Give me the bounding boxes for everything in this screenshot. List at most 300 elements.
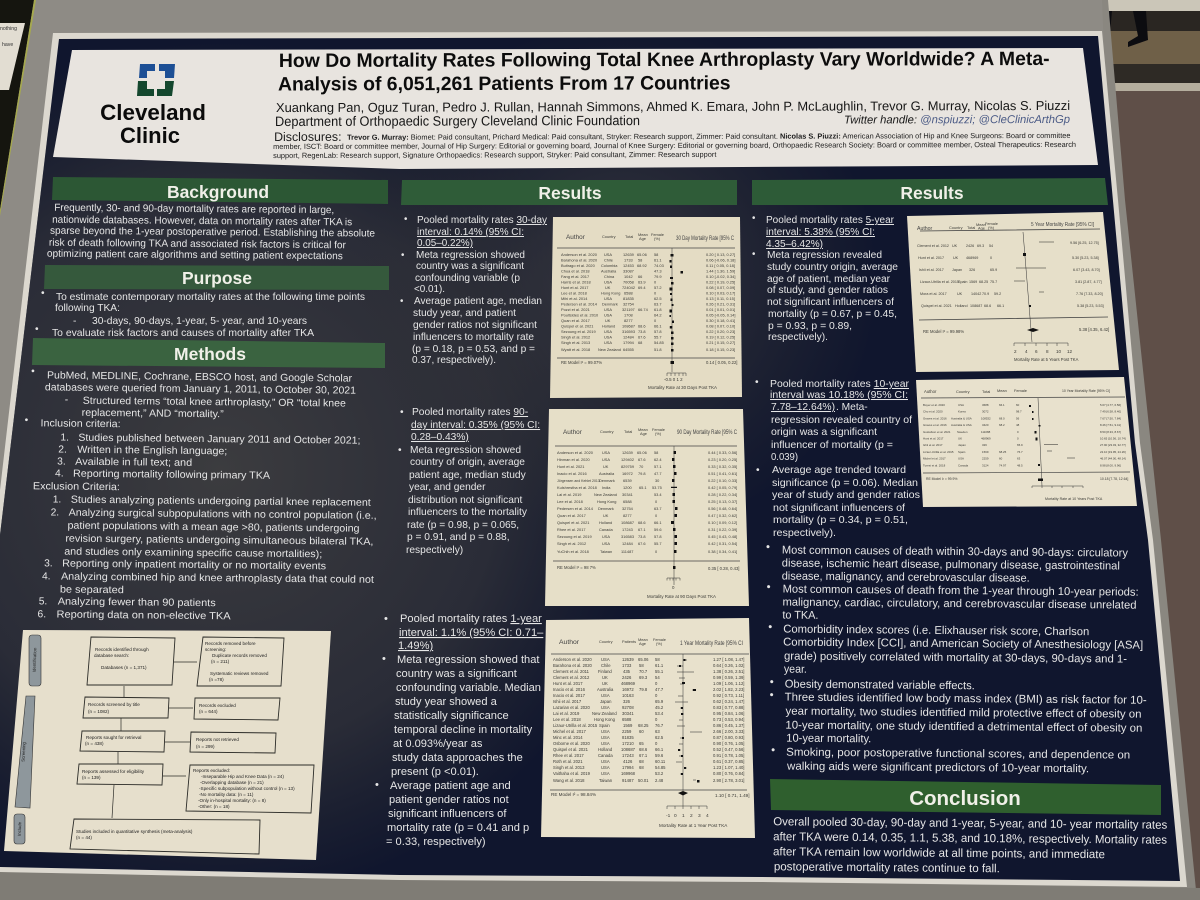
text: 10-year results: . Meta- bbox=[836, 402, 868, 413]
text: 10-year results: regression revealed country of bbox=[771, 415, 912, 426]
heading: Results centre bbox=[401, 180, 737, 205]
chart: 90-day forest plot: Sezoung et al. 2019 bbox=[557, 534, 592, 539]
chart: 10-year forest plot: Australia & USA bbox=[951, 423, 972, 427]
box: records identified: Databases (n = 1,371) bbox=[101, 665, 147, 670]
text: 30-day results: Average patient age, median bbox=[414, 296, 542, 307]
chart: 90-day forest plot: Author bbox=[563, 429, 583, 436]
chart: 30-day forest plot: 64.2 bbox=[654, 312, 662, 318]
chart: 30-day forest plot: 0.08 [ 0.07, 0.09] bbox=[706, 285, 735, 290]
chart: 10-year forest plot: 68.0 bbox=[999, 416, 1005, 420]
chart: 10-year forest plot: 2259 bbox=[982, 457, 989, 461]
box: records removed: (n =78) bbox=[209, 677, 224, 682]
chart: 5-year forest plot: 326 bbox=[969, 268, 975, 272]
logo wordmark bbox=[100, 100, 206, 148]
chart: 5-year forest plot: 75.7 bbox=[990, 280, 997, 284]
chart: 30-day forest plot: 6588 bbox=[624, 290, 633, 296]
chart: 30-day forest plot: 316593 bbox=[622, 329, 635, 334]
chart: 90-day forest plot: 65.1 bbox=[639, 485, 647, 490]
chart: 10-year forest plot: Spain bbox=[958, 450, 966, 454]
chart: 30-day forest plot: 0.21 [ 0.15, 0.27] bbox=[706, 340, 735, 345]
heading: Conclusion: Conclusion bbox=[909, 787, 1021, 810]
text: 10-year results: not significant influencers of bbox=[773, 503, 905, 514]
chart: 90-day forest plot: USA bbox=[602, 541, 610, 546]
chart: 90-day forest plot: 0.23 [ 0.20, 0.25] bbox=[708, 457, 737, 462]
box: studies included: Studies included in quantitative synthesis (meta-analysis) bbox=[76, 829, 193, 834]
chart: 10-year forest plot: Canada bbox=[958, 463, 969, 467]
disclosures bbox=[273, 128, 1076, 160]
text: 90-day results: Meta regression showed bbox=[410, 445, 521, 456]
chart: 10-year forest plot: Australia & USA bbox=[951, 416, 972, 420]
chart: 30-day forest plot: 57.2 bbox=[654, 285, 662, 290]
chart: 1-year forest plot: 58 bbox=[655, 657, 660, 662]
chart: 10-year forest plot: 63 bbox=[1017, 457, 1021, 461]
chart: 10-year forest plot: 76.7 bbox=[1017, 450, 1023, 454]
chart: 30-day forest plot: 17994 bbox=[623, 340, 635, 345]
chart: 90-day forest plot: 67.6 bbox=[638, 457, 646, 462]
chart: 90-day forest plot: 0.56 [ 0.48, 0.64] bbox=[708, 506, 737, 511]
chart: 1-year forest plot: 2.66 [ 2.00, 3.33] bbox=[713, 729, 744, 734]
chart: 1-year forest plot: Rhee et al. 2017 bbox=[553, 753, 584, 758]
arrows: flow connectors bbox=[112, 662, 197, 818]
chart: 5-year forest plot: Female bbox=[985, 221, 998, 226]
chart: 1-year forest plot: Michel et al. 2017 bbox=[553, 729, 586, 734]
logo wordmark: Cleveland bbox=[100, 100, 206, 125]
chart: 30-day forest plot: 724042 bbox=[622, 285, 635, 290]
chart: 90-day forest plot: 0.51 [ 0.41, 0.61] bbox=[708, 471, 737, 476]
text: 30-day results: study year, and patient bbox=[413, 308, 516, 319]
chart: 10-year forest plot: 8.98 [8.00, 9.96] bbox=[1100, 463, 1121, 467]
chart: 90-day forest plot: 66.1 bbox=[654, 520, 662, 525]
box: records identified bbox=[87, 637, 175, 685]
text: 30-day results: • bbox=[401, 250, 405, 261]
chart: 10-year forest plot: 48 bbox=[1016, 423, 1020, 427]
text: 30-day results: influencers to mortality rate bbox=[413, 332, 534, 343]
text: 5-year results: 4.35–6.42%) bbox=[766, 239, 823, 250]
chart: 90-day forest plot: 67.1 bbox=[638, 527, 646, 532]
chart: 5-year forest plot: 10 bbox=[1056, 349, 1062, 354]
chart: 10-year forest plot: 5.67 [4.77, 6.56] bbox=[1100, 403, 1121, 407]
chart: 1-year forest plot: 0.62 [ 0.24, 1.47] bbox=[713, 699, 744, 704]
chart: 10-year forest plot: 3124 bbox=[982, 463, 989, 467]
chart: 10-year forest plot: 1569 bbox=[982, 450, 989, 454]
chart: 90-day forest plot: 57.8 bbox=[654, 534, 662, 539]
chart: 30-day forest plot: 61.1 bbox=[654, 258, 662, 262]
text: 30-day results: confounding variable (p bbox=[415, 273, 520, 284]
chart: 10-year forest plot: 0 bbox=[1017, 436, 1019, 440]
chart: 5-year forest plot: 2 bbox=[1014, 349, 1017, 354]
chart: 5-year forest plot: UK bbox=[953, 256, 959, 260]
text: 90-day results: patient age, median study bbox=[409, 470, 527, 481]
chart: 5-year forest plot: 3.81 [2.87, 4.77] bbox=[1075, 280, 1102, 284]
chart: 90-day forest plot: Mortality Rate at 90 Days Post TKA bbox=[647, 594, 716, 599]
text: methods list: Studies published between January 2011 and October 2021; bbox=[78, 433, 360, 447]
text: background paragraph: Frequently, 30- and 90-day mortality rates are reported in large, bbox=[54, 203, 334, 216]
chart: 90-day forest plot: 57.1 bbox=[654, 464, 662, 469]
chart: 30-day forest plot: Total bbox=[625, 234, 633, 239]
chart: 1-year forest plot: Hunt et al. 2017 bbox=[553, 681, 583, 686]
heading: Conclusion bbox=[770, 779, 1161, 815]
chart: 90-day forest plot: 58 bbox=[654, 450, 658, 455]
text: methods list bbox=[23, 366, 378, 624]
box: reports not retrieved: Reports not retrieved bbox=[196, 737, 239, 742]
chart: 90-day forest plot: 0.31 [ 0.22, 0.39] bbox=[708, 527, 737, 532]
text: 1-year results: study year showed a bbox=[395, 696, 498, 708]
chart: 30-day forest plot: 0.05 [-0.05, 0.14] bbox=[706, 312, 735, 318]
chart: 30-day forest plot bbox=[550, 217, 742, 398]
chart: 90-day forest plot: 0.38 [ 0.34, 0.41] bbox=[708, 549, 737, 554]
chart: 1-year forest plot: 169968 bbox=[621, 771, 636, 776]
box: reports excluded: -Inseparable Hip and Knee Data (n = 24) bbox=[201, 774, 284, 779]
side label: Identification bbox=[29, 635, 41, 686]
chart: 5-year forest plot: 6.07 [3.43, 8.70] bbox=[1073, 268, 1100, 272]
chart: 1-year forest plot: 66.1 bbox=[655, 747, 664, 752]
text: 90-day results: country of origin, average bbox=[410, 457, 525, 468]
text: 10-year results: 0.039) bbox=[771, 452, 798, 463]
chart: 90-day forest plot: Denmark bbox=[598, 506, 614, 511]
neighbouring poster at top left: have bbox=[2, 42, 13, 48]
chart: 5-year forest plot: 2426 bbox=[966, 244, 974, 248]
text: 10-year results: • bbox=[755, 377, 759, 388]
text: methods list: 2. bbox=[51, 507, 59, 519]
chart: 1-year forest plot: 79.8 bbox=[639, 687, 648, 692]
text: causes and risk factors: 10-year mortality, one study identified a detrimental effect of obesity on bbox=[785, 720, 1142, 735]
chart: 90-day forest plot: Rhee et al. 2017 bbox=[557, 527, 586, 532]
chart: 90-day forest plot: 30 bbox=[655, 478, 660, 483]
text: methods list: Reporting data on non-elective TKA bbox=[57, 610, 231, 622]
chart: 10-year forest plot: 65.9 bbox=[1017, 443, 1023, 447]
text: methods list: PubMed, MEDLINE, Cochrane, EBSCO host, and Google Scholar bbox=[47, 370, 353, 385]
text: 30-day results: (p = 0.18, p = 0.53, and p = bbox=[412, 344, 535, 355]
chart: 1-year forest plot: Spain bbox=[599, 723, 610, 728]
chart: 10-year forest plot: 10 Year Mortality Rate [95% CI] bbox=[1062, 389, 1110, 393]
chart: 1-year forest plot: 0 bbox=[674, 813, 677, 819]
chart: 10-year forest plot: 74.97 bbox=[999, 463, 1007, 467]
text: 5-year results: age of patient, median year bbox=[767, 274, 891, 285]
chart: 30-day forest plot: (%) bbox=[654, 236, 661, 241]
text: causes and risk factors: disease, malignancy, and cerebrovascular disease. bbox=[782, 571, 1030, 585]
heading: Methods: Methods bbox=[174, 344, 246, 364]
chart: 10-year forest plot: USA bbox=[958, 457, 964, 461]
chart: 1-year forest plot: Taiwan bbox=[599, 778, 613, 783]
chart: 10-year forest plot: 7.67 [7.50, 7.84] bbox=[1100, 416, 1121, 420]
chart: 1-year forest plot: Clement et al. 2011 bbox=[553, 669, 590, 674]
chart: 30-day forest plot: 12639 bbox=[623, 252, 634, 257]
chart: 30-day forest plot: 55.7 bbox=[654, 334, 662, 340]
chart: 30-day forest plot: 30 Day Mortality Rate [95% C bbox=[676, 235, 734, 242]
chart: 1-year forest plot: 0.86 [ 0.45, 1.37] bbox=[713, 723, 744, 728]
chart: 30-day forest plot: 79.9 bbox=[654, 274, 662, 279]
text: 5-year results: • bbox=[752, 213, 756, 224]
chart: 30-day forest plot: Holland bbox=[602, 324, 615, 328]
text: causes and risk factors: year. bbox=[784, 664, 807, 676]
chart: 1-year forest plot: Barahona et al. 2020 bbox=[553, 663, 593, 668]
chart: 1-year forest plot: New Zealand bbox=[592, 711, 617, 716]
chart: 90-day forest plot: Holland bbox=[599, 520, 612, 525]
chart: 5-year forest plot: 5.38 [4.35, 6.42] bbox=[1079, 327, 1109, 332]
chart: 30-day forest plot: 0.22 [ 0.20, 0.23] bbox=[706, 329, 735, 334]
box: records excluded: (n = 644) bbox=[199, 709, 218, 714]
chart: 10-year forest plot bbox=[916, 377, 1137, 507]
chart: 30-day forest plot: 0 bbox=[654, 280, 657, 284]
text: 10-year results: respectively). bbox=[773, 528, 836, 539]
chart: 1-year forest plot: -1 bbox=[666, 813, 671, 819]
chart: 1-year forest plot: 0 bbox=[655, 741, 658, 746]
chart: 10-year forest plot: 3072 bbox=[982, 410, 989, 414]
chart: 90-day forest plot: USA bbox=[602, 450, 610, 455]
text: methods list: Analyzing combined hip and knee arthroplasty data that could not bbox=[61, 572, 374, 586]
chart: 30-day forest plot: 58 bbox=[654, 252, 658, 257]
chart: 1-year forest plot: Holland bbox=[598, 747, 613, 752]
text: 1-year results: temporal decline in mortality bbox=[394, 724, 533, 736]
chart: 30-day forest plot: 12453 bbox=[623, 263, 634, 268]
chart: 30-day forest plot: 0.10 [-0.02, 0.34] bbox=[706, 274, 735, 279]
neighbouring poster at top left bbox=[0, 0, 36, 216]
text: methods list: - bbox=[65, 395, 68, 406]
text: methods list: Analyzing surgical subpopulations with no control population (i.e., bbox=[69, 508, 377, 522]
chart: 30-day forest plot: Australia bbox=[601, 268, 617, 274]
chart: 1-year forest plot: USA bbox=[601, 771, 610, 776]
chart: 10-year forest plot: Graves et al. 2016 bbox=[923, 416, 947, 420]
chart: 30-day forest plot: 0.26 [ 0.21, 0.31] bbox=[706, 302, 735, 306]
box: reports excluded: -Other: (n = 18) bbox=[198, 804, 230, 809]
text: 5-year results: of study, and gender ratios bbox=[767, 285, 888, 296]
box: records removed: Systematic reviews removed bbox=[210, 671, 269, 676]
side label: Included bbox=[14, 814, 25, 844]
chart: 1-year forest plot: Inacio et al. 2016 bbox=[553, 687, 586, 692]
text: conclusion paragraph: Overall pooled 30-day, 90-day and 1-year, 5-year, and 10- year mortality rates bbox=[773, 815, 1167, 832]
heading: Background: Background bbox=[167, 182, 269, 202]
box: reports excluded: -No mortality data: (n = 11) bbox=[199, 792, 254, 797]
text: 1-year results: • bbox=[384, 613, 388, 625]
chart: 90-day forest plot: 108687 bbox=[621, 520, 634, 525]
chart: 30-day forest plot: Singh et al. 2012 bbox=[561, 334, 590, 340]
chart: 5-year forest plot: Ishii et al. 2017 bbox=[919, 268, 944, 272]
chart: 30-day forest plot: USA bbox=[604, 296, 612, 301]
chart: 1-year forest plot: 58 bbox=[639, 663, 644, 668]
text: 90-day results: • bbox=[398, 445, 402, 456]
chart: 1-year forest plot: 3 bbox=[698, 813, 701, 819]
chart: 30-day forest plot: Buitrago et al. 2020 bbox=[561, 263, 596, 268]
heading: Purpose bbox=[44, 265, 389, 290]
chart: 30-day forest plot: 12484 bbox=[623, 334, 635, 340]
text: conclusion paragraph: after TKA remain low worldwide at all time points, and immediate bbox=[773, 845, 1105, 861]
chart: 5-year forest plot: 8 bbox=[1046, 349, 1049, 354]
chart: 30-day forest plot: 63.7 bbox=[654, 302, 662, 306]
chart: 30-day forest plot: Sezoung et al. 2019 bbox=[561, 329, 596, 334]
chart: 10-year forest plot: 3688 bbox=[982, 403, 989, 407]
chart: 30-day forest plot: 0.20 [ 0.13, 0.27] bbox=[706, 252, 735, 257]
chart: 10-year forest plot: Graves et al. 2016 bbox=[923, 423, 947, 427]
text: causes and risk factors: Comorbidity Index [CCI], and American Society of Anesthesiology [ASA] bbox=[783, 637, 1143, 652]
chart: 10-year forest plot: 10.18 [7.78, 12.64] bbox=[1100, 477, 1128, 481]
chart: 1-year forest plot: 53.2 bbox=[655, 771, 664, 776]
chart: 1-year forest plot: Roth et al. 2021 bbox=[553, 759, 583, 764]
text: 90-day results: Pooled mortality rates 90- bbox=[412, 407, 528, 418]
chart: 1-year forest plot: 65.06 bbox=[638, 657, 649, 662]
chart: 1-year forest plot: 65.9 bbox=[655, 699, 664, 704]
heading: Results right bbox=[752, 178, 1108, 205]
chart: 5-year forest plot: 468969 bbox=[966, 256, 978, 260]
chart: 90-day forest plot: 6588 bbox=[623, 499, 632, 504]
chart: 5-year forest plot: RE Model I² = 99.98% bbox=[923, 329, 964, 334]
text: background paragraph bbox=[47, 203, 376, 263]
box: records removed: screening: bbox=[205, 647, 226, 652]
chart: 1-year forest plot: Chile bbox=[601, 663, 611, 668]
chart: 30-day forest plot: 73.8 bbox=[638, 329, 646, 334]
chart: 90-day forest plot: 32754 bbox=[622, 506, 634, 511]
chart: 10-year forest plot: Boyer et al. 2020 bbox=[923, 403, 945, 407]
text: 5-year results: Pooled mortality rates 5-year bbox=[766, 215, 895, 226]
box: records removed: Records removed before bbox=[205, 641, 256, 646]
box: reports not retrieved: (n = 299) bbox=[196, 744, 215, 749]
chart: 1-year forest plot: 53.4 bbox=[655, 711, 664, 716]
text: methods list: • bbox=[25, 415, 29, 426]
chart: 30-day forest plot: 66.74 bbox=[638, 307, 649, 312]
chart: 1-year forest plot: USA bbox=[601, 705, 610, 710]
chart: 1-year forest plot: Ishii et al. 2017 bbox=[553, 699, 582, 704]
heading: Purpose: Purpose bbox=[182, 268, 252, 288]
chart: 30-day forest plot: 0.13 [ 0.11, 0.15] bbox=[706, 296, 735, 301]
chart: 1-year forest plot: 17994 bbox=[622, 765, 634, 770]
chart: 1-year forest plot: 68 bbox=[639, 759, 644, 764]
text: 10-year results: Pooled mortality rates 10-year bbox=[770, 379, 910, 390]
chart: 1-year forest plot: 0.80 [ 0.76, 0.84] bbox=[713, 771, 744, 776]
chart: 30-day forest plot: Mortality Rate at 30 Days Post TKA bbox=[648, 385, 717, 390]
text: purpose list: To evaluate risk factors and causes of mortality after TKA bbox=[52, 328, 314, 339]
chart: 30-day forest plot: Wyatt et al. 2018 bbox=[561, 347, 590, 352]
chart: 5-year forest plot: Quispel et al. 2021 bbox=[921, 304, 952, 308]
box: records removed: (n = 211) bbox=[211, 659, 230, 664]
text: 1-year results bbox=[375, 613, 544, 848]
chart: 90-day forest plot: Pedersen et al. 2014 bbox=[557, 506, 594, 511]
chart: 1-year forest plot: 68.6 bbox=[639, 747, 648, 752]
chart: 1-year forest plot: Vaithaha et al. 2019 bbox=[553, 771, 591, 776]
box: reports assessed: (n = 139) bbox=[82, 775, 101, 780]
chart: 30-day forest plot: Female bbox=[651, 232, 664, 237]
chart: 90-day forest plot bbox=[545, 409, 749, 606]
chart: 10-year forest plot: 468969 bbox=[981, 436, 991, 440]
chart: 30-day forest plot: 0 bbox=[654, 318, 657, 323]
chart: 5-year forest plot: Spain bbox=[958, 280, 967, 284]
chart: 10-year forest plot: 8.46 [7.51, 9.41] bbox=[1100, 423, 1121, 427]
chart: 1-year forest plot: 68.25 bbox=[638, 723, 649, 728]
chart: 1-year forest plot: Finland bbox=[598, 669, 612, 674]
chart: 5-year forest plot: Japan bbox=[952, 268, 962, 272]
text: causes and risk factors: Comorbidity index scores (i.e. Elixhauser risk score, Charlson bbox=[783, 624, 1089, 638]
chart: 90-day forest plot: 1200 bbox=[623, 485, 632, 490]
chart: 1-year forest plot: 10163 bbox=[622, 693, 634, 698]
text: 10-year results: significance (p = 0.06). Median bbox=[772, 478, 918, 489]
chart: 90-day forest plot: 12639 bbox=[622, 450, 633, 455]
text: 30-day results bbox=[400, 214, 547, 366]
text: methods list: Reporting only inpatient mortality or no mortality events bbox=[62, 559, 326, 572]
chart: 1-year forest plot: 55.1 bbox=[655, 669, 664, 674]
chart: 10-year forest plot: 60 bbox=[1016, 403, 1020, 407]
text: 90-day results: distribution not significant bbox=[408, 495, 523, 506]
text: 1-year results: statistically significance bbox=[394, 710, 509, 722]
chart: 5-year forest plot: 9.56 [6.25, 12.75] bbox=[1070, 241, 1099, 245]
chart: 30-day forest plot: Hong Kong bbox=[601, 290, 620, 296]
chart: 5-year forest plot: Mean bbox=[976, 222, 986, 227]
chart: 30-day forest plot: Quan et al. 2017 bbox=[561, 318, 590, 323]
text: methods list: 3. bbox=[44, 558, 53, 569]
chart: 5-year forest plot: 5.30 [5.23, 5.38] bbox=[1072, 256, 1099, 260]
chart: 1-year forest plot: 76.7 bbox=[655, 723, 664, 728]
chart: 30-day forest plot: USA bbox=[604, 307, 612, 312]
chart: 1-year forest plot: 468969 bbox=[621, 681, 636, 686]
text: 1-year results: interval: 1.1% (95% CI: 0.71– bbox=[399, 627, 544, 639]
chart: 1-year forest plot: 1.23 [ 1.07, 1.40] bbox=[713, 765, 744, 770]
chart: 1-year forest plot: 91487 bbox=[622, 778, 634, 783]
chart: 5-year forest plot: 70.9 bbox=[982, 292, 989, 296]
text: 90-day results: year, and gender bbox=[409, 482, 486, 493]
box: reports not retrieved bbox=[190, 732, 276, 753]
text: methods list: Exclusion Criteria: bbox=[33, 481, 120, 493]
chart: 1-year forest plot: 65 bbox=[639, 741, 644, 746]
chart: 1-year forest plot: 1.27 [ 1.08, 1.47] bbox=[713, 657, 744, 662]
text: methods list: 2. bbox=[58, 445, 67, 456]
chart: 1-year forest plot: 435 bbox=[623, 669, 631, 674]
text: purpose list: To estimate contemporary mortality rates at the following time points bbox=[56, 292, 365, 303]
text: 10-year results: 7.78–12.64%) bbox=[771, 402, 835, 413]
heading: Results right: Results bbox=[900, 183, 964, 203]
chart: 10-year forest plot: 22.10 [19.95, 24.26] bbox=[1100, 450, 1126, 454]
chart: 10-year forest plot: Michel et al. 2017 bbox=[923, 457, 946, 461]
chart: 30-day forest plot: Pozzi et al. 2021 bbox=[561, 307, 590, 312]
box: reports sought: (n = 438) bbox=[85, 741, 104, 746]
chart: 1-year forest plot: 1.10 [ 0.71, 1.49] bbox=[715, 793, 749, 798]
chart: 10-year forest plot: 56 bbox=[1016, 416, 1020, 420]
flow diagram: PRISMA bbox=[4, 630, 331, 860]
chart: 90-day forest plot: 829759 bbox=[621, 464, 634, 469]
chart: 5-year forest plot: 69.3 bbox=[977, 244, 984, 248]
chart: 5-year forest plot: 65.9 bbox=[990, 268, 997, 272]
text: purpose list: • bbox=[41, 288, 45, 299]
text: 1-year results: • bbox=[375, 779, 379, 791]
chart: 1-year forest plot: 2.48 bbox=[655, 778, 664, 783]
chart: 1-year forest plot: Hong Kong bbox=[594, 717, 616, 722]
chart: 1-year forest plot: USA bbox=[601, 741, 610, 746]
chart: 30-day forest plot: 8277 bbox=[624, 318, 633, 323]
chart: 30-day forest plot: Colombia bbox=[601, 263, 618, 268]
chart: 1-year forest plot: 1569 bbox=[623, 723, 633, 728]
chart: 30-day forest plot: Fang et al. 2017 bbox=[561, 274, 589, 279]
text: 90-day results: 0.28–0.43%) bbox=[411, 432, 469, 443]
chart: 30-day forest plot: 69.4 bbox=[638, 285, 646, 290]
chart: 10-year forest plot: Hunt et al. 2017 bbox=[923, 436, 944, 440]
text: 5-year results bbox=[752, 213, 898, 343]
text: 1-year results: Meta regression showed that bbox=[397, 654, 539, 666]
chart: 30-day forest plot: China bbox=[604, 274, 615, 279]
chart: 90-day forest plot: 17243 bbox=[622, 527, 633, 532]
chart: 90-day forest plot: 0.22 [ 0.10, 0.33] bbox=[708, 478, 737, 483]
box: records screened bbox=[83, 697, 169, 718]
text: 10-year results bbox=[755, 377, 920, 539]
chart: 90-day forest plot: 63.7 bbox=[654, 506, 662, 511]
chart: 1-year forest plot: 0 bbox=[655, 681, 658, 686]
chart: 90-day forest plot: 30341 bbox=[622, 492, 633, 497]
chart: 30-day forest plot: 1042 bbox=[624, 274, 633, 279]
text: methods list: 6. bbox=[38, 609, 46, 620]
text: 30-day results: • bbox=[400, 296, 404, 307]
poster title: How Do Mortality Rates Following Total Knee Arthroplasty Vary Worldwide? A Meta- bbox=[279, 48, 1050, 72]
chart: 90-day forest plot: Canada bbox=[599, 527, 613, 532]
disclosures: Disclosures: bbox=[274, 130, 342, 144]
chart: 5-year forest plot bbox=[907, 212, 1119, 372]
chart: 1-year forest plot: 61.1 bbox=[655, 663, 664, 668]
text: causes and risk factors: • bbox=[767, 581, 771, 593]
chart: 1-year forest plot: 4126 bbox=[623, 759, 633, 764]
